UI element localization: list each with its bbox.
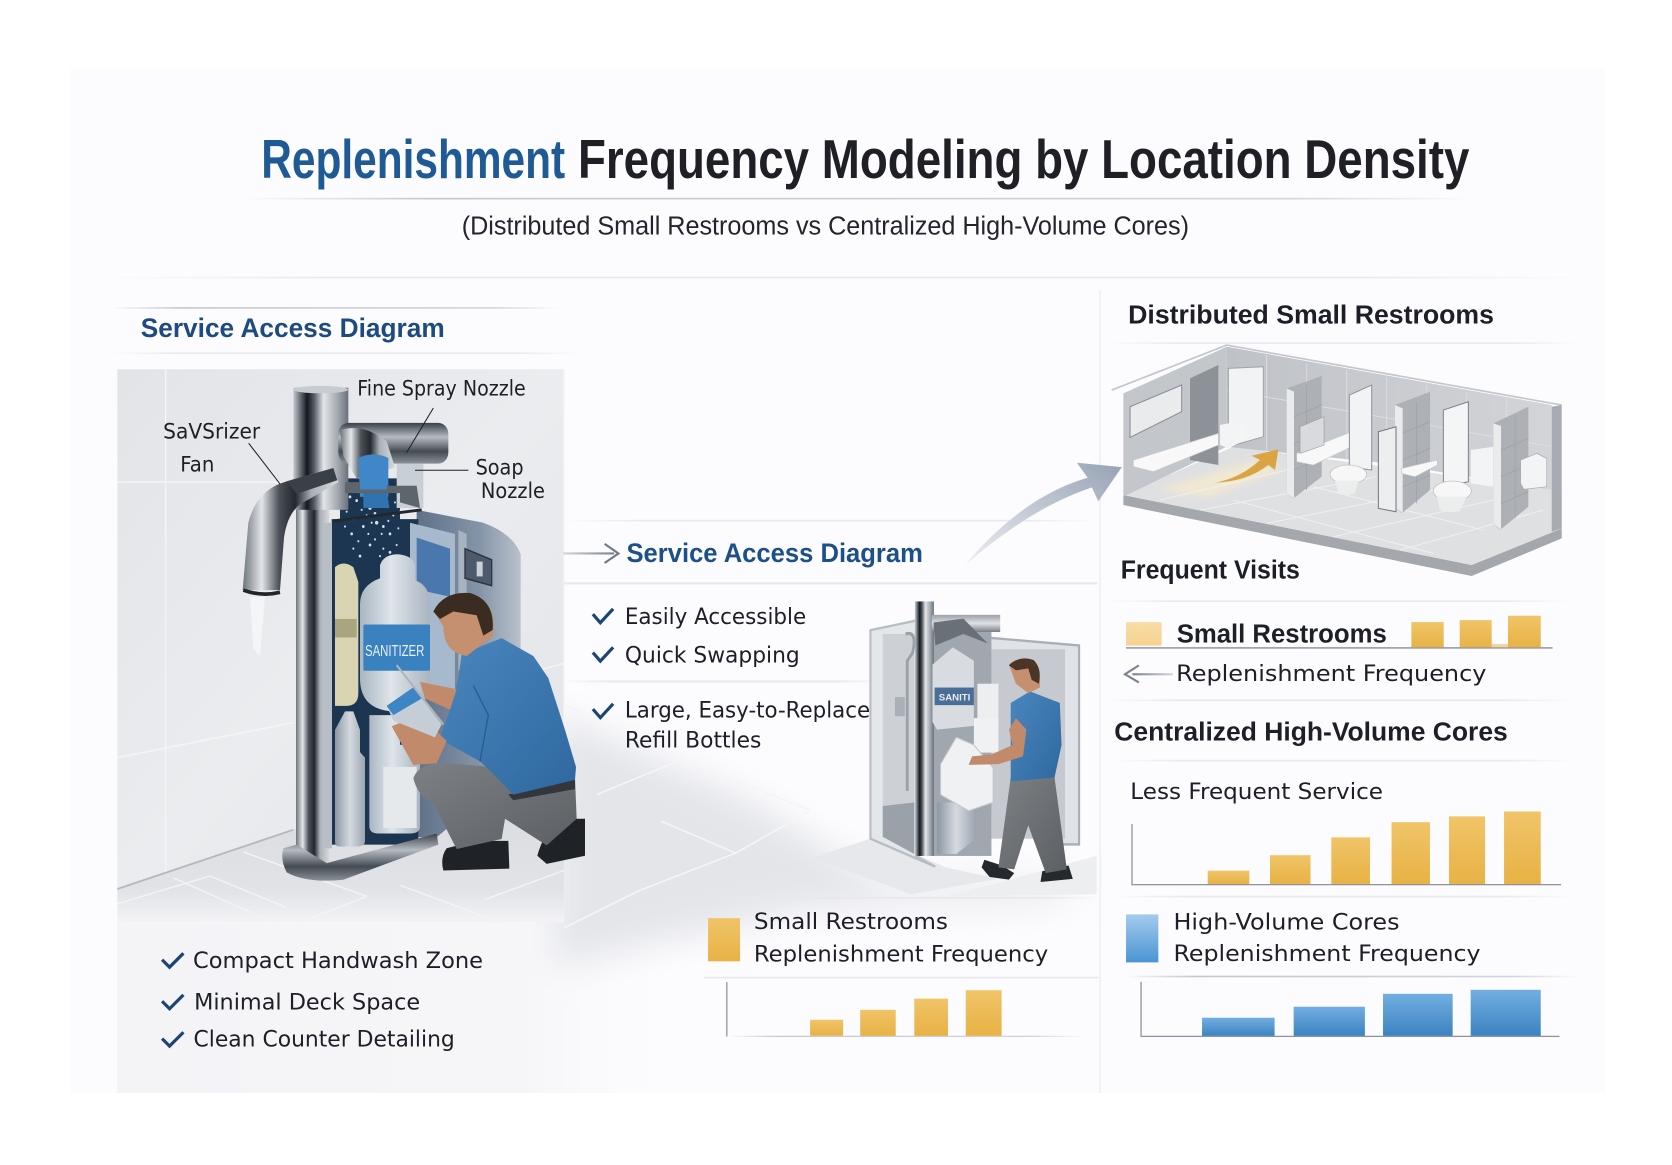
refill bottle [932, 647, 974, 730]
legend: high-volume cores [1126, 909, 1481, 967]
checklist: service features: Easily Accessible [625, 604, 806, 630]
callout: soap nozzle: Nozzle [481, 479, 545, 504]
checklist: handwash zone: Clean Counter Detailing [194, 1027, 455, 1053]
housing back [870, 621, 935, 867]
head assembly [338, 423, 448, 464]
checklist: service features: Large, Easy-to-Replace [625, 698, 870, 724]
checklist: handwash zone: Minimal Deck Space [194, 989, 420, 1015]
floor [117, 797, 564, 922]
silver lower tank [937, 802, 976, 854]
checklist: service features: Quick Swapping [625, 643, 800, 669]
big sanitizer bottle [360, 554, 430, 711]
left wall [1123, 347, 1227, 497]
door 3 [1378, 427, 1396, 512]
callout: sanitizer: SaVSrizer [163, 419, 260, 444]
wall toilet [1220, 420, 1245, 448]
floor continuation [554, 704, 1088, 965]
heading: service access diagram center: Service Access Diagram [626, 538, 923, 568]
label: less frequent service: Less Frequent Service [1130, 779, 1383, 805]
lower left bottle [335, 711, 365, 846]
interior [932, 630, 991, 856]
column [915, 601, 934, 856]
heading: centralized high-volume cores: Centralized High-Volume Cores [1114, 719, 1508, 747]
checklist: service features [593, 604, 870, 754]
floor [1123, 447, 1562, 565]
lower big bottle [369, 715, 420, 833]
heading: service access diagram left: Service Access Diagram [141, 313, 445, 343]
base plate [282, 833, 438, 881]
technician [969, 658, 1073, 882]
door panel 2 [1349, 385, 1372, 470]
interior [332, 478, 418, 845]
floor tiles [813, 837, 998, 894]
illustration: hand dryer faucet unit with technician [117, 369, 585, 922]
callout leader lines [249, 408, 468, 484]
label: replenishment frequency: Replenishment Frequency [1176, 661, 1486, 687]
callout: fan: Fan [180, 452, 214, 477]
illustration: small service unit with technician: SANITI [939, 692, 970, 703]
callout: soap nozzle [476, 456, 545, 504]
partition 3 [1493, 407, 1528, 530]
legend: small restrooms [708, 909, 1048, 967]
roof edge [1112, 345, 1562, 405]
title: Replenishment [261, 129, 565, 190]
callout: fine spray nozzle: Fine Spray Nozzle [357, 377, 526, 402]
vanity door [1190, 365, 1218, 465]
legend row: small restrooms mini bars: Small Restrooms [1177, 620, 1387, 648]
bar chart: small restrooms [726, 982, 1086, 1037]
label: frequent visits: Frequent Visits [1121, 557, 1300, 585]
mirror [1130, 385, 1182, 437]
subtitle: (Distributed Small Restrooms vs Centralized High-Volume Cores) [462, 213, 1189, 241]
sink 3 [1402, 460, 1437, 477]
legend: high-volume cores: High-Volume Cores [1173, 909, 1400, 935]
door [990, 638, 1079, 844]
legend: small restrooms: Replenishment Frequency [754, 941, 1048, 967]
illustration: small service unit with technician [813, 601, 1097, 896]
end wall [1552, 405, 1562, 532]
checklist: handwash zone: Compact Handwash Zone [193, 948, 483, 974]
wall [117, 369, 564, 898]
wall bin [1521, 453, 1547, 489]
bar chart: high-volume cores [1140, 982, 1560, 1037]
bar chart: high-volume service frequency [1131, 811, 1561, 885]
legend: high-volume cores: Replenishment Frequency [1173, 941, 1481, 967]
back wall [1227, 347, 1552, 490]
checklist: service features: Refill Bottles [625, 728, 761, 754]
technician [387, 593, 585, 870]
arrow: large curved arrow to restrooms [965, 463, 1122, 565]
spout [243, 468, 338, 590]
partition 2 [1395, 392, 1430, 513]
legend: small restrooms: Small Restrooms [754, 909, 948, 935]
heading: distributed small restrooms: Distributed Small Restrooms [1128, 302, 1494, 330]
title [261, 129, 1469, 190]
gold flow arrow [1215, 449, 1278, 483]
legend row: small restrooms mini bars [1126, 616, 1553, 649]
sink counter [1133, 433, 1218, 472]
checklist: handwash zone [162, 948, 483, 1053]
lower floor fade under illustration [117, 922, 693, 1093]
door 4 [1443, 402, 1468, 487]
illustration: isometric restroom layout [1112, 345, 1562, 576]
illustration: hand dryer faucet unit with technician: SANITIZER [365, 643, 424, 660]
title: Frequency Modeling by Location Density [578, 129, 1469, 190]
spray particles [344, 495, 401, 558]
partition 1 [1287, 376, 1322, 498]
slab [1123, 495, 1562, 576]
toilet 2 [1330, 465, 1367, 495]
arrow: to service access diagram [563, 544, 618, 563]
cabinet body [417, 510, 521, 837]
white tray [941, 737, 993, 811]
tower column [296, 508, 329, 863]
left beige bottle [335, 563, 358, 706]
callout: soap nozzle: Soap [476, 456, 524, 481]
arrow: replenishment frequency [1125, 665, 1173, 682]
toilet 3 [1433, 447, 1493, 512]
sink 2 [1297, 432, 1352, 465]
